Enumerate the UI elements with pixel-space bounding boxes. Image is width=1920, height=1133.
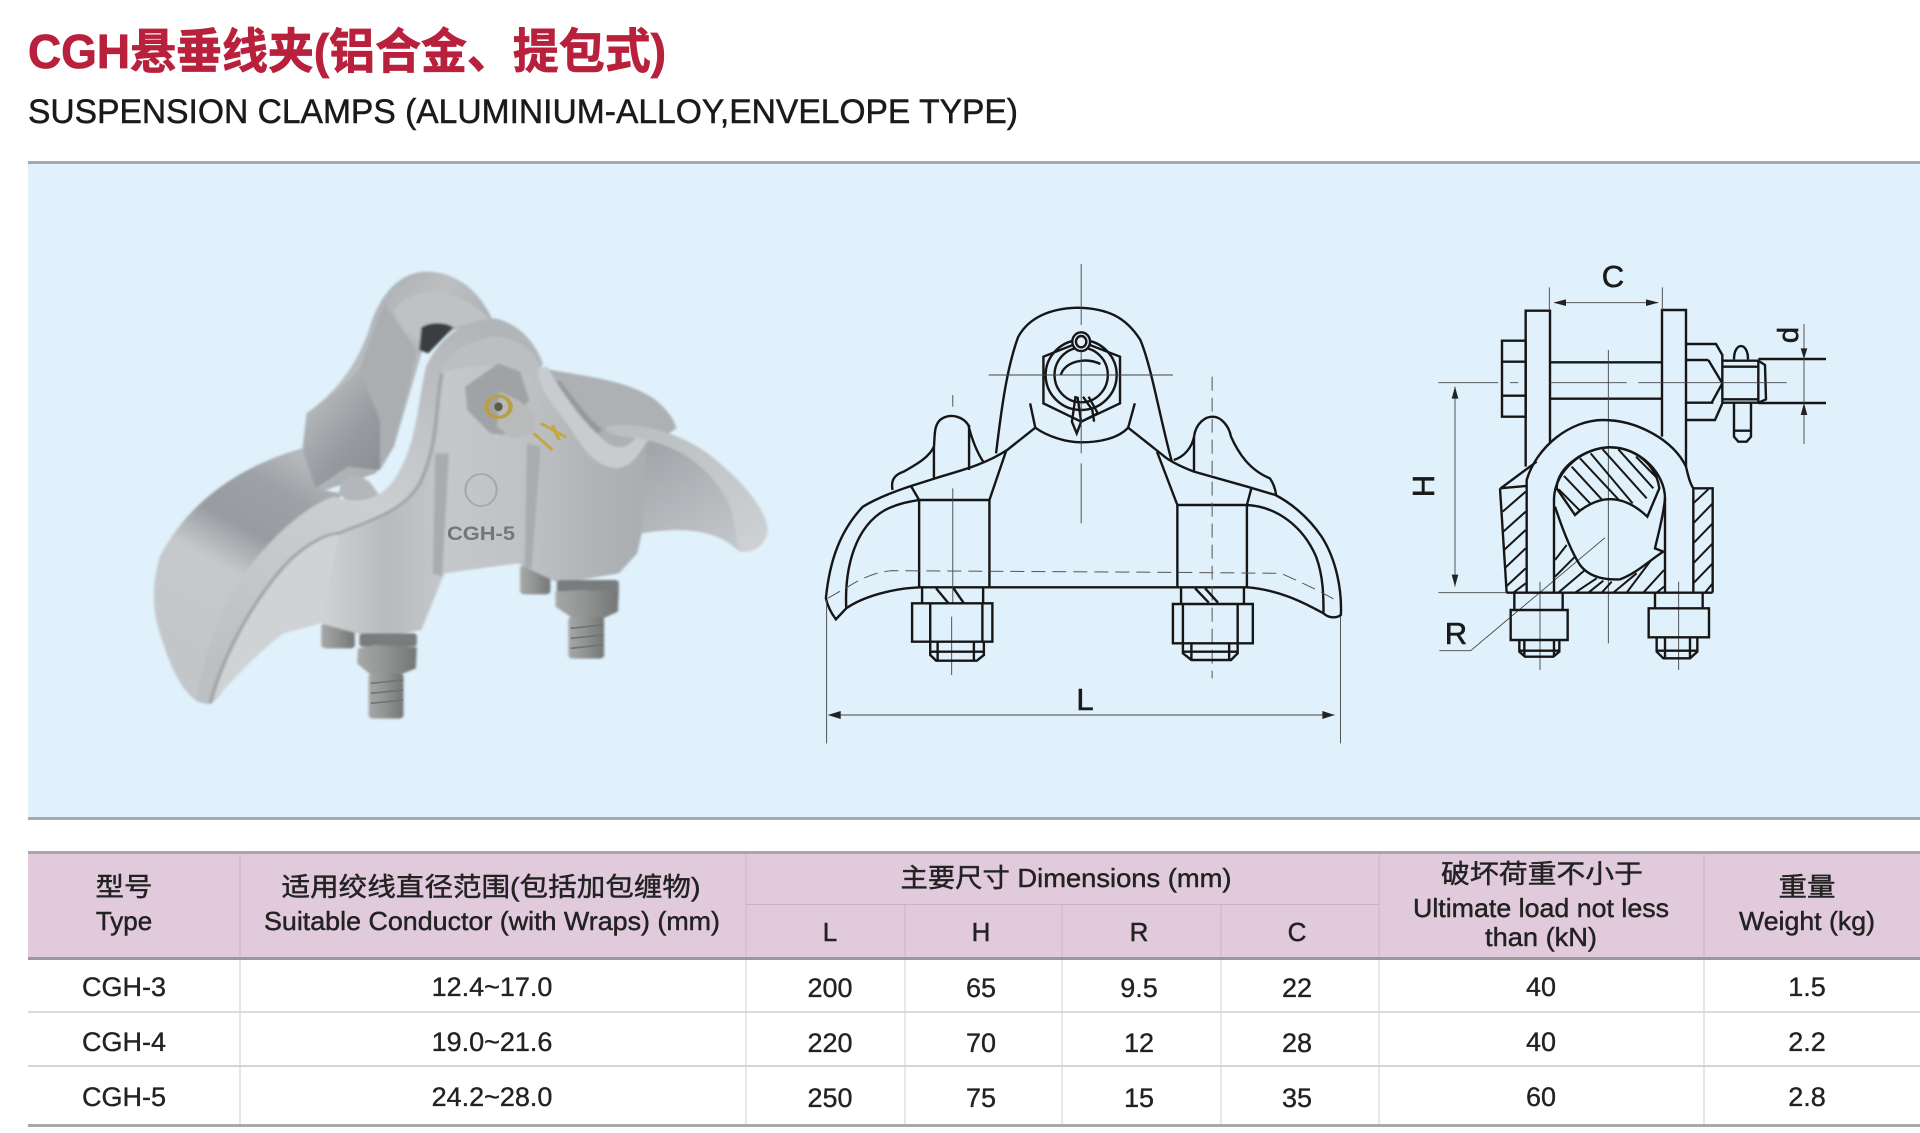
- header: ultimate load: Ultimate load not less: [1413, 893, 1669, 923]
- row: CGH-5: CGH-5: [82, 1082, 166, 1112]
- row: CGH-4: CGH-4: [82, 1027, 166, 1057]
- header: weight: 重量: [1778, 872, 1836, 902]
- row: CGH-5: 24.2~28.0: [432, 1082, 552, 1112]
- panel: product illustrations: [28, 161, 1920, 820]
- table rules: [28, 851, 1920, 1127]
- row: CGH-4: 70: [966, 1028, 996, 1058]
- row: CGH-5: 75: [966, 1083, 996, 1113]
- subtitle: SUSPENSION CLAMPS (ALUMINIUM-ALLOY,ENVELOPE TYPE): [28, 93, 1018, 131]
- row: CGH-3: 65: [966, 973, 996, 1003]
- row: CGH-5: 250: [807, 1083, 853, 1113]
- row: CGH-4: 28: [1282, 1028, 1312, 1058]
- product photo: aluminium suspension clamp: [154, 272, 768, 719]
- dimension label C: C: [1602, 259, 1624, 294]
- row: CGH-3: [82, 972, 1826, 1003]
- header: dimensions: H: [972, 917, 990, 947]
- specification table: [28, 851, 1920, 1127]
- header: weight: Weight (kg): [1739, 906, 1875, 936]
- dimension label L: L: [1076, 682, 1094, 717]
- row: CGH-3: CGH-3: [82, 972, 166, 1002]
- header: dimensions: 主要尺寸 Dimensions (mm): [900, 863, 1232, 893]
- side view technical drawing: [1438, 287, 1826, 670]
- header: suitable conductor: Suitable Conductor (with Wraps) (mm): [264, 906, 720, 936]
- header: dimensions: R: [1130, 917, 1148, 947]
- header: weight: [1739, 872, 1875, 936]
- row: CGH-4: 40: [1526, 1027, 1556, 1057]
- row: CGH-3: 200: [807, 973, 853, 1003]
- embossed model mark on clamp: CGH-5: [447, 524, 515, 545]
- row: CGH-5: 35: [1282, 1083, 1312, 1113]
- front view technical drawing: [826, 264, 1341, 743]
- header: ultimate load: [1413, 859, 1669, 952]
- header: type: [96, 872, 152, 936]
- row: CGH-5: 2.8: [1788, 1082, 1826, 1112]
- dimension label R: R: [1445, 616, 1467, 651]
- title: CGH悬垂线夹(铝合金、提包式): [28, 26, 666, 79]
- row: CGH-4: [82, 1027, 1826, 1058]
- row: CGH-3: 12.4~17.0: [432, 972, 552, 1002]
- header: type: 型号: [96, 872, 152, 902]
- row: CGH-5: [82, 1082, 1826, 1113]
- row: CGH-3: 9.5: [1120, 973, 1158, 1003]
- header: suitable conductor: [264, 872, 720, 936]
- header: ultimate load: than (kN): [1485, 922, 1597, 952]
- dimension label H: H: [1406, 475, 1441, 497]
- table header background: [28, 852, 1920, 958]
- row: CGH-4: 12: [1124, 1028, 1154, 1058]
- header: dimensions: C: [1288, 917, 1306, 947]
- header: ultimate load: 破坏荷重不小于: [1441, 859, 1643, 889]
- header: dimensions: [823, 863, 1306, 947]
- header: suitable conductor: 适用绞线直径范围(包括加包缠物): [282, 872, 700, 902]
- row: CGH-4: 220: [807, 1028, 853, 1058]
- row: CGH-3: 40: [1526, 972, 1556, 1002]
- row: CGH-5: 15: [1124, 1083, 1154, 1113]
- row: CGH-4: 2.2: [1788, 1027, 1826, 1057]
- dimension label d: d: [1773, 327, 1805, 343]
- header: dimensions: L: [823, 917, 837, 947]
- row: CGH-3: 22: [1282, 973, 1312, 1003]
- row: CGH-4: 19.0~21.6: [432, 1027, 552, 1057]
- row: CGH-5: 60: [1526, 1082, 1556, 1112]
- row: CGH-3: 1.5: [1788, 972, 1826, 1002]
- header: type: Type: [96, 906, 152, 936]
